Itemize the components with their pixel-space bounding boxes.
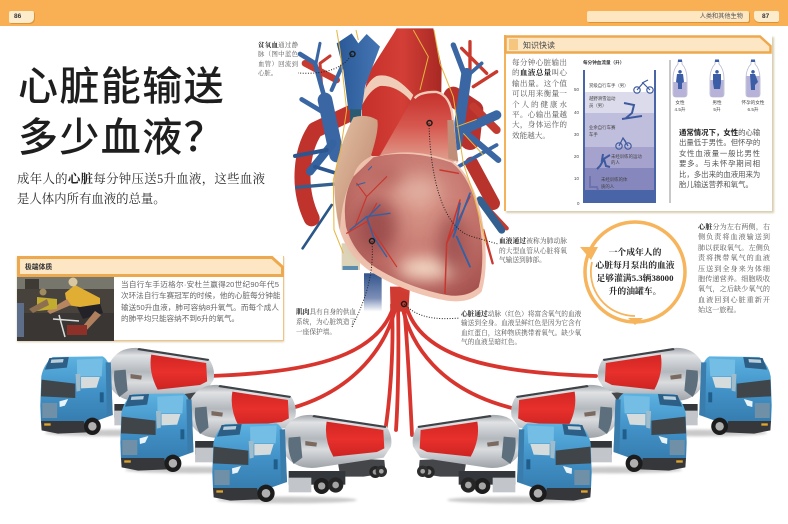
circle text (595, 247, 675, 296)
intro text (512, 58, 567, 140)
callout: pulmonary artery: 血液通过被称为肺动脉 (499, 238, 567, 245)
bottles: blood volume by group: 女性 (675, 99, 685, 106)
callout: pulmonary artery: 的大型血管从心脏将氧 (499, 248, 567, 255)
pulmonary trunk (378, 89, 455, 162)
callout: muscle: 系统，为心脏筑造了 (296, 319, 356, 326)
callout: deoxygenated blood: 脉（图中蓝色 (258, 51, 298, 58)
intro text: 大，身体运作的 (512, 120, 567, 129)
intro text: 的血液总量叫心 (512, 68, 567, 77)
bar chart: blood per minute: 0 (577, 201, 580, 206)
bar chart: blood per minute: 30 (574, 132, 579, 137)
callout: muscle: 一座保护墙。 (296, 329, 336, 336)
bar chart: blood per minute (574, 59, 656, 206)
callout: muscle: 肌肉具有自身的供血 (296, 309, 356, 316)
intro text: 平。心输出量越 (512, 110, 567, 119)
title: 心脏能输送 (18, 54, 225, 112)
text: left and right sides of the heart: 肺以获取氧气。左侧负 (698, 244, 770, 252)
page number 86: 86 (14, 13, 21, 20)
bar chart: blood per minute: 赏级自行车手（男） (589, 82, 629, 89)
callout: arteries: 血红蛋白，这种物质携带着氧气。缺少氧 (461, 330, 581, 337)
tanker left 1 (40, 348, 214, 436)
tanker right 3 (413, 415, 592, 503)
header band (0, 0, 788, 26)
callout circle: 5.3 tankers (580, 220, 687, 325)
callout: muscle (296, 308, 356, 336)
photo: cyclists (17, 277, 114, 341)
note: women's cardiac output: 通常情况下，女性的心输 (679, 128, 760, 137)
panel: extreme fitness (17, 256, 284, 341)
panel header: 极端体质 (25, 262, 52, 271)
bar chart: blood per minute: 未经训练的运动 (611, 153, 642, 160)
callout: arteries: 气的血液呈暗红色。 (461, 339, 521, 346)
callout: deoxygenated blood: 贫氧血通过静 (258, 42, 298, 49)
bar chart: blood per minute: 50 (574, 87, 579, 92)
bar chart: blood per minute: 的人 (611, 159, 620, 166)
text (121, 280, 280, 323)
descending aorta (390, 287, 410, 312)
bar chart: blood per minute: 10 (574, 176, 579, 181)
right atrium (334, 116, 378, 230)
text: left and right sides of the heart: 血液回到心脏重新开 (698, 296, 770, 304)
subtitle (17, 172, 265, 206)
callout: deoxygenated blood: 心脏。 (258, 70, 277, 77)
text: left and right sides of the heart: 侧负责将血液输送到 (698, 233, 770, 241)
bottles: blood volume by group: 6.5升 (748, 106, 759, 113)
text: left and right sides of the heart: 责将携带氧气的血液 (698, 254, 770, 262)
bar chart: blood per minute: 每分钟血流量（升） (583, 59, 624, 66)
page number 87 (754, 11, 779, 22)
subtitle: 是人体内所有血液的总量。 (17, 192, 166, 206)
panel header (504, 35, 772, 54)
callout: arteries: 输送到全身。血液呈鲜红色是因为它含有 (461, 320, 581, 327)
callout: deoxygenated blood (258, 42, 298, 77)
note: women's cardiac output: 胎儿输送营养和氧气。 (679, 180, 753, 189)
text: 当自行车手迈格尔·安杜兰赢得20世纪90年代5 (121, 280, 279, 289)
callout: pulmonary artery (499, 237, 567, 264)
tanker right 1 (598, 348, 772, 436)
bottles: blood volume by group: 5升 (713, 106, 721, 113)
intro text: 输出量。这个值 (512, 79, 567, 88)
subtitle: 成年人的心脏每分钟压送5升血液，这些血液 (17, 172, 265, 186)
text: left and right sides of the heart: 压送到全身来为体细 (698, 265, 770, 273)
intro text: 效能越大。 (512, 131, 550, 140)
bottles: blood volume by group: 怀孕的女性 (742, 99, 765, 106)
title: 多少血液？ (18, 105, 225, 163)
circle text: 心脏每月泵出的血液 (595, 260, 675, 270)
circle text: 升的油罐车。 (609, 286, 661, 296)
intro text: 每分钟心脏输出 (512, 58, 567, 67)
bar chart: blood per minute: 员（男） (589, 103, 607, 109)
text: left and right sides of the heart: 氧气，之后缺少氧气的 (698, 285, 770, 293)
text: 次环法自行车赛冠军的时候，他的心脏每分钟能 (121, 291, 280, 300)
circle text: 一个成年人的 (609, 247, 661, 257)
callout: pulmonary artery: 气输送到肺部。 (499, 257, 546, 264)
tanker right 2 (511, 385, 687, 473)
bar chart: blood per minute: 质的人 (601, 183, 615, 190)
icons: activity figures (590, 80, 653, 190)
coronary vessels (347, 167, 470, 293)
inferior cava (364, 273, 382, 312)
bottles: blood volume by group: 4.5升 (675, 106, 686, 113)
bar chart: blood per minute: 40 (574, 110, 579, 115)
note: women's cardiac output: 比，多出来的血液用来为 (679, 170, 760, 179)
bar chart: blood per minute: 未经训练的体 (601, 176, 628, 183)
superior vena cava (337, 33, 380, 110)
note: women's cardiac output: 要多。与未怀孕期间相 (679, 159, 760, 168)
aorta (362, 28, 442, 157)
ventricles (334, 152, 486, 301)
panel: knowledge quick read (504, 35, 772, 211)
circle text: 足够灌满5.3辆38000 (596, 273, 673, 283)
tanker left 3 (212, 415, 391, 503)
section title tab: 人类和其他生物 (700, 13, 743, 20)
vessels behind (295, 42, 507, 263)
callout: arteries: 心脏通过动脉（红色）将富含氧气的血液 (461, 311, 581, 318)
text: left and right sides of the heart: 始这一旅程。 (698, 306, 741, 314)
note: women's cardiac output (679, 128, 760, 189)
intro text: 可以用来衡量一 (512, 89, 567, 98)
intro text: 个人的健康水 (512, 100, 567, 109)
text: left and right sides of the heart: 心脏分为左右两侧，右 (698, 223, 770, 231)
note: women's cardiac output: 女性血液量一般比男性 (679, 149, 760, 158)
bar chart: blood per minute: 20 (574, 154, 579, 159)
panel header (17, 256, 284, 277)
text: left and right sides of the heart (698, 222, 770, 314)
tanker left 2 (120, 385, 296, 473)
title (18, 54, 225, 163)
page number 86 (9, 11, 34, 23)
text: 输送50升血液，肺可容纳8升氧气。而每个成人 (121, 303, 279, 312)
callout: deoxygenated blood: 血管）回流到 (258, 61, 298, 68)
text: 的肺平均只能容纳不到6升的氧气。 (121, 314, 239, 323)
page number 87: 87 (762, 13, 769, 20)
note: women's cardiac output: 出量低于男性。但怀孕的 (679, 138, 760, 147)
callout: arteries (461, 310, 582, 346)
ring and arrows (580, 220, 687, 325)
bar chart: blood per minute: 越野滑雪运动 (589, 95, 616, 102)
text: left and right sides of the heart: 胞传递营养。细胞吸收 (698, 275, 770, 283)
bar chart: blood per minute: 业余自行车赛 (589, 124, 616, 131)
divider (669, 60, 670, 203)
bottles: blood volume by group: 男性 (712, 99, 722, 106)
section title tab (587, 11, 749, 22)
bottles: blood volume by group (672, 60, 765, 113)
bar chart: blood per minute: 车手 (589, 131, 598, 138)
panel header: 知识快读 (523, 40, 555, 50)
nerves (333, 30, 486, 253)
